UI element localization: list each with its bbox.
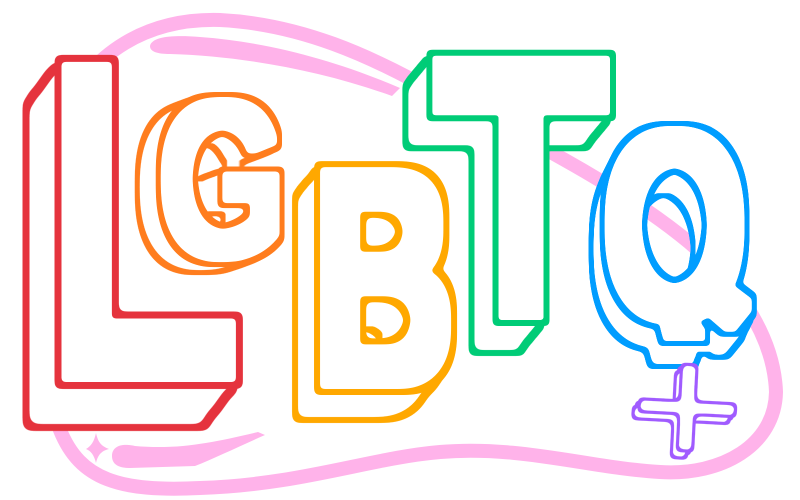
letter Q: Q [602, 77, 747, 374]
sparkle [86, 433, 109, 463]
letter B: B [313, 108, 454, 449]
letter G: G [158, 56, 286, 304]
bottom inner highlight [112, 432, 265, 468]
top inner highlight [150, 36, 400, 96]
letter T: T [430, 0, 612, 386]
